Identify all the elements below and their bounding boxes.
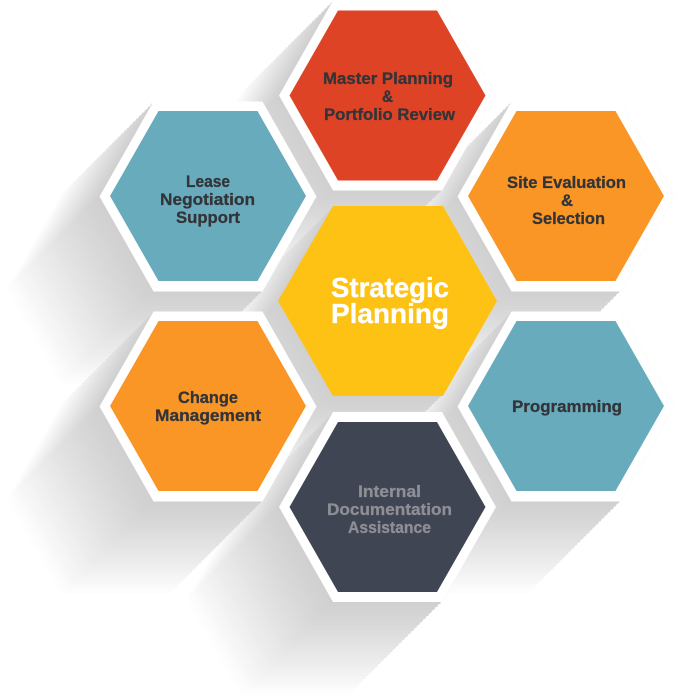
panel: Strategic Planning centre: Planning bbox=[331, 298, 449, 329]
panel: Lease Negotiation Support bbox=[100, 102, 316, 292]
panel: Master Planning & Portfolio Review: Master Planning bbox=[323, 69, 453, 88]
panel: Strategic Planning centre bbox=[278, 206, 497, 396]
panel: Change Management: Management bbox=[155, 406, 261, 425]
panel: Programming bbox=[458, 312, 674, 502]
panel: Lease Negotiation Support: Lease bbox=[186, 172, 230, 191]
panel: Master Planning & Portfolio Review: Portfolio Review bbox=[324, 105, 456, 124]
panel: Master Planning & Portfolio Review: & bbox=[382, 87, 393, 106]
panel: Change Management bbox=[100, 312, 316, 502]
panel: Lease Negotiation Support: Negotiation bbox=[160, 190, 255, 209]
panel: Lease Negotiation Support: Support bbox=[176, 208, 240, 227]
panel: Site Evaluation & Selection: Selection bbox=[532, 209, 605, 228]
panel: Internal Documentation Assistance bbox=[279, 412, 496, 602]
panel: Internal Documentation Assistance: Internal bbox=[358, 482, 421, 501]
panel: Strategic Planning centre: Strategic bbox=[331, 272, 449, 303]
panel: Programming: Programming bbox=[512, 397, 622, 416]
panel: Site Evaluation & Selection: & bbox=[561, 191, 573, 210]
panel: Change Management: Change bbox=[178, 388, 238, 407]
panel: Internal Documentation Assistance: Documentation bbox=[327, 500, 452, 519]
panel: Site Evaluation & Selection: Site Evaluation bbox=[507, 173, 626, 192]
panel: Internal Documentation Assistance: Assistance bbox=[348, 518, 431, 537]
panel: Site Evaluation & Selection bbox=[458, 102, 674, 292]
panel: Master Planning & Portfolio Review bbox=[279, 0, 496, 190]
